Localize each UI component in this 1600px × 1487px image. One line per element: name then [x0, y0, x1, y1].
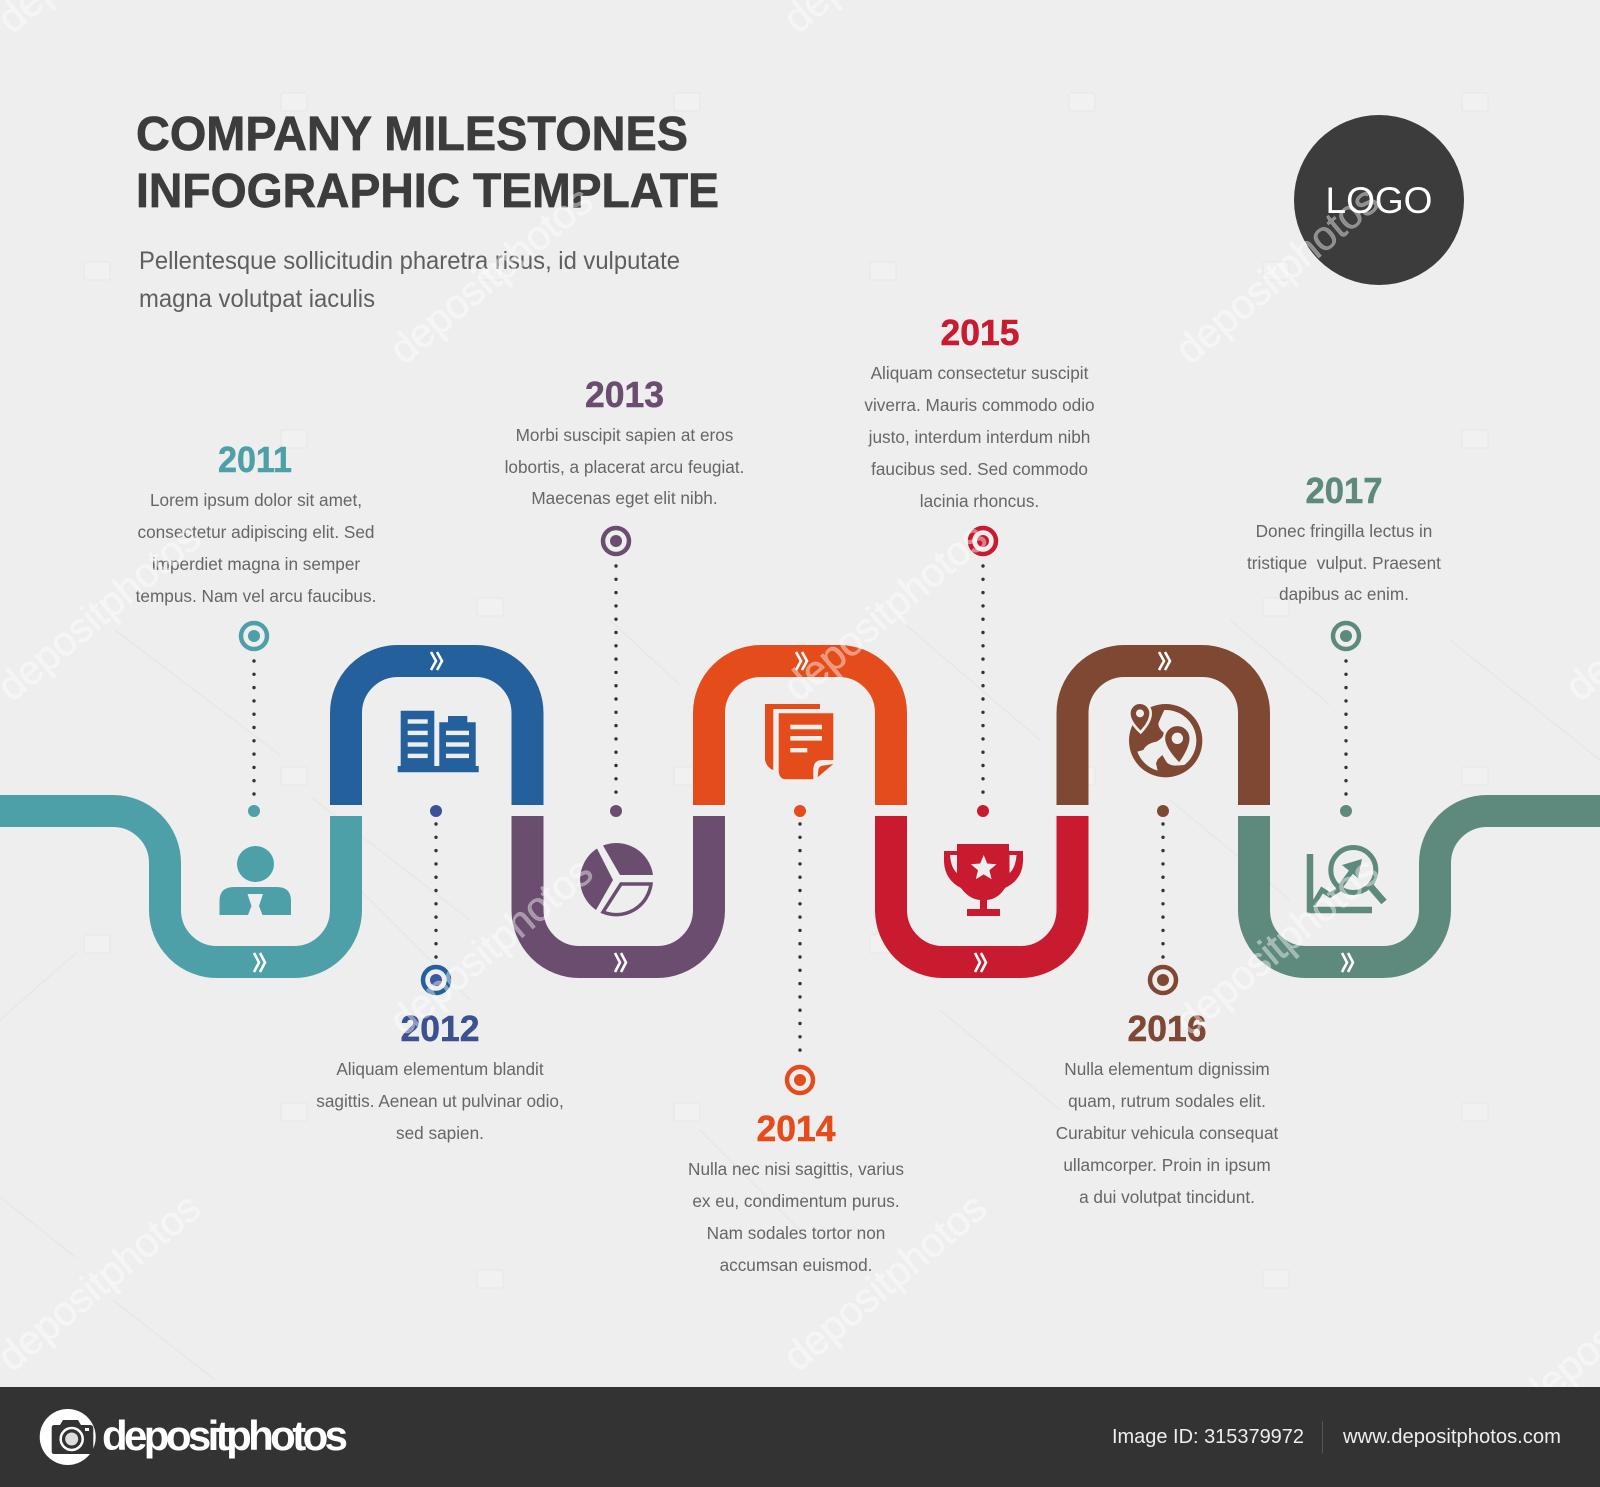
- text 2015: lacinia rhoncus.: [920, 491, 1039, 511]
- text 2015: justo, interdum interdum nibh: [868, 427, 1090, 447]
- text 2015: Aliquam consectetur suscipit: [871, 363, 1089, 383]
- year 2013: 2013: [585, 374, 664, 415]
- icon: globe with pins: [1129, 703, 1202, 777]
- text 2013: lobortis, a placerat arcu feugiat.: [505, 457, 744, 477]
- text 2012: sagittis. Aenean ut pulvinar odio,: [316, 1091, 564, 1111]
- watermarks: depositphotos: [1166, 177, 1387, 373]
- text 2014: Nulla nec nisi sagittis, varius: [688, 1159, 904, 1179]
- subtitle: [139, 247, 680, 313]
- milestone 2015: [864, 312, 1095, 916]
- icon: person: [220, 846, 291, 915]
- watermarks: depositphotos: [774, 514, 995, 710]
- text 2013: Maecenas eget elit nibh.: [531, 488, 718, 508]
- marker 2012: [423, 805, 449, 993]
- text 2017: Donec fringilla lectus in: [1256, 521, 1432, 541]
- watermarks: depositphotos: [774, 1184, 995, 1380]
- text 2017: [1247, 521, 1441, 604]
- text 2017: dapibus ac enim.: [1279, 584, 1409, 604]
- year 2016: 2016: [1128, 1008, 1206, 1049]
- milestone 2011: [136, 439, 376, 915]
- text 2016: a dui volutpat tincidunt.: [1079, 1187, 1255, 1207]
- text 2014: ex eu, condimentum purus.: [692, 1191, 900, 1211]
- marker 2015: [970, 528, 996, 817]
- icon: trophy: [944, 844, 1023, 916]
- text 2016: quam, rutrum sodales elit.: [1068, 1091, 1266, 1111]
- text 2016: [1056, 1059, 1279, 1207]
- milestone 2016: [1056, 703, 1279, 1207]
- text 2011: imperdiet magna in semper: [152, 554, 360, 574]
- icon: chart under magnifier: [1310, 848, 1384, 910]
- watermarks: depositphotos: [380, 848, 601, 1044]
- year 2012: 2012: [400, 1008, 480, 1049]
- year 2011: 2011: [218, 439, 292, 480]
- text 2017: tristique vulput. Praesent: [1247, 553, 1441, 573]
- milestone 2017: [1247, 470, 1441, 910]
- text 2016: Nulla elementum dignissim: [1064, 1059, 1270, 1079]
- text 2015: viverra. Mauris commodo odio: [864, 395, 1095, 415]
- year 2017: 2017: [1306, 470, 1382, 511]
- marker 2013: [603, 528, 629, 817]
- text 2015: [864, 363, 1095, 511]
- watermarks: depositphotos: [1166, 848, 1387, 1044]
- text 2013: Morbi suscipit sapien at eros: [516, 425, 733, 445]
- text 2011: tempus. Nam vel arcu faucibus.: [136, 586, 376, 606]
- subtitle: Pellentesque sollicitudin pharetra risus, id vulputate: [139, 247, 680, 275]
- text 2012: [316, 1059, 564, 1143]
- milestone 2013: [505, 374, 744, 915]
- title: COMPANY MILESTONES: [136, 108, 688, 161]
- logo badge: [1294, 115, 1464, 285]
- icon: pie chart: [580, 843, 653, 915]
- marker 2017: [1333, 623, 1359, 817]
- year 2015: 2015: [940, 312, 1020, 353]
- marker 2011: [241, 623, 267, 817]
- text 2011: consectetur adipiscing elit. Sed: [138, 522, 374, 542]
- text 2014: accumsan euismod.: [720, 1255, 872, 1275]
- image id: Image ID: 315379972: [1112, 1426, 1304, 1448]
- text 2013: [505, 425, 744, 508]
- milestone 2014: [688, 704, 904, 1275]
- marker 2016: [1150, 805, 1176, 993]
- text 2012: Aliquam elementum blandit: [336, 1059, 544, 1079]
- year 2014: 2014: [756, 1108, 836, 1149]
- footer bar: [0, 1387, 1600, 1487]
- text 2012: sed sapien.: [396, 1123, 484, 1143]
- text 2014: Nam sodales tortor non: [707, 1223, 885, 1243]
- icon: documents: [765, 704, 833, 779]
- watermarks: depositphotos: [380, 177, 601, 373]
- footer wordmark: depositphotos: [102, 1412, 348, 1459]
- website: www.depositphotos.com: [1342, 1426, 1561, 1448]
- marker 2014: [787, 805, 813, 1093]
- text 2016: ullamcorper. Proin in ipsum: [1063, 1155, 1271, 1175]
- title: INFOGRAPHIC TEMPLATE: [136, 165, 719, 218]
- footer camera logo: [40, 1409, 96, 1465]
- logo badge: LOGO: [1326, 180, 1432, 221]
- text 2016: Curabitur vehicula consequat: [1056, 1123, 1279, 1143]
- title: [136, 108, 719, 218]
- text 2014: [688, 1159, 904, 1275]
- icon: buildings: [398, 711, 479, 772]
- text 2011: [136, 490, 376, 606]
- text 2011: Lorem ipsum dolor sit amet,: [150, 490, 362, 510]
- winding timeline track: [0, 652, 1600, 972]
- milestone 2012: [316, 711, 564, 1143]
- subtitle: magna volutpat iaculis: [139, 285, 375, 313]
- text 2015: faucibus sed. Sed commodo: [871, 459, 1088, 479]
